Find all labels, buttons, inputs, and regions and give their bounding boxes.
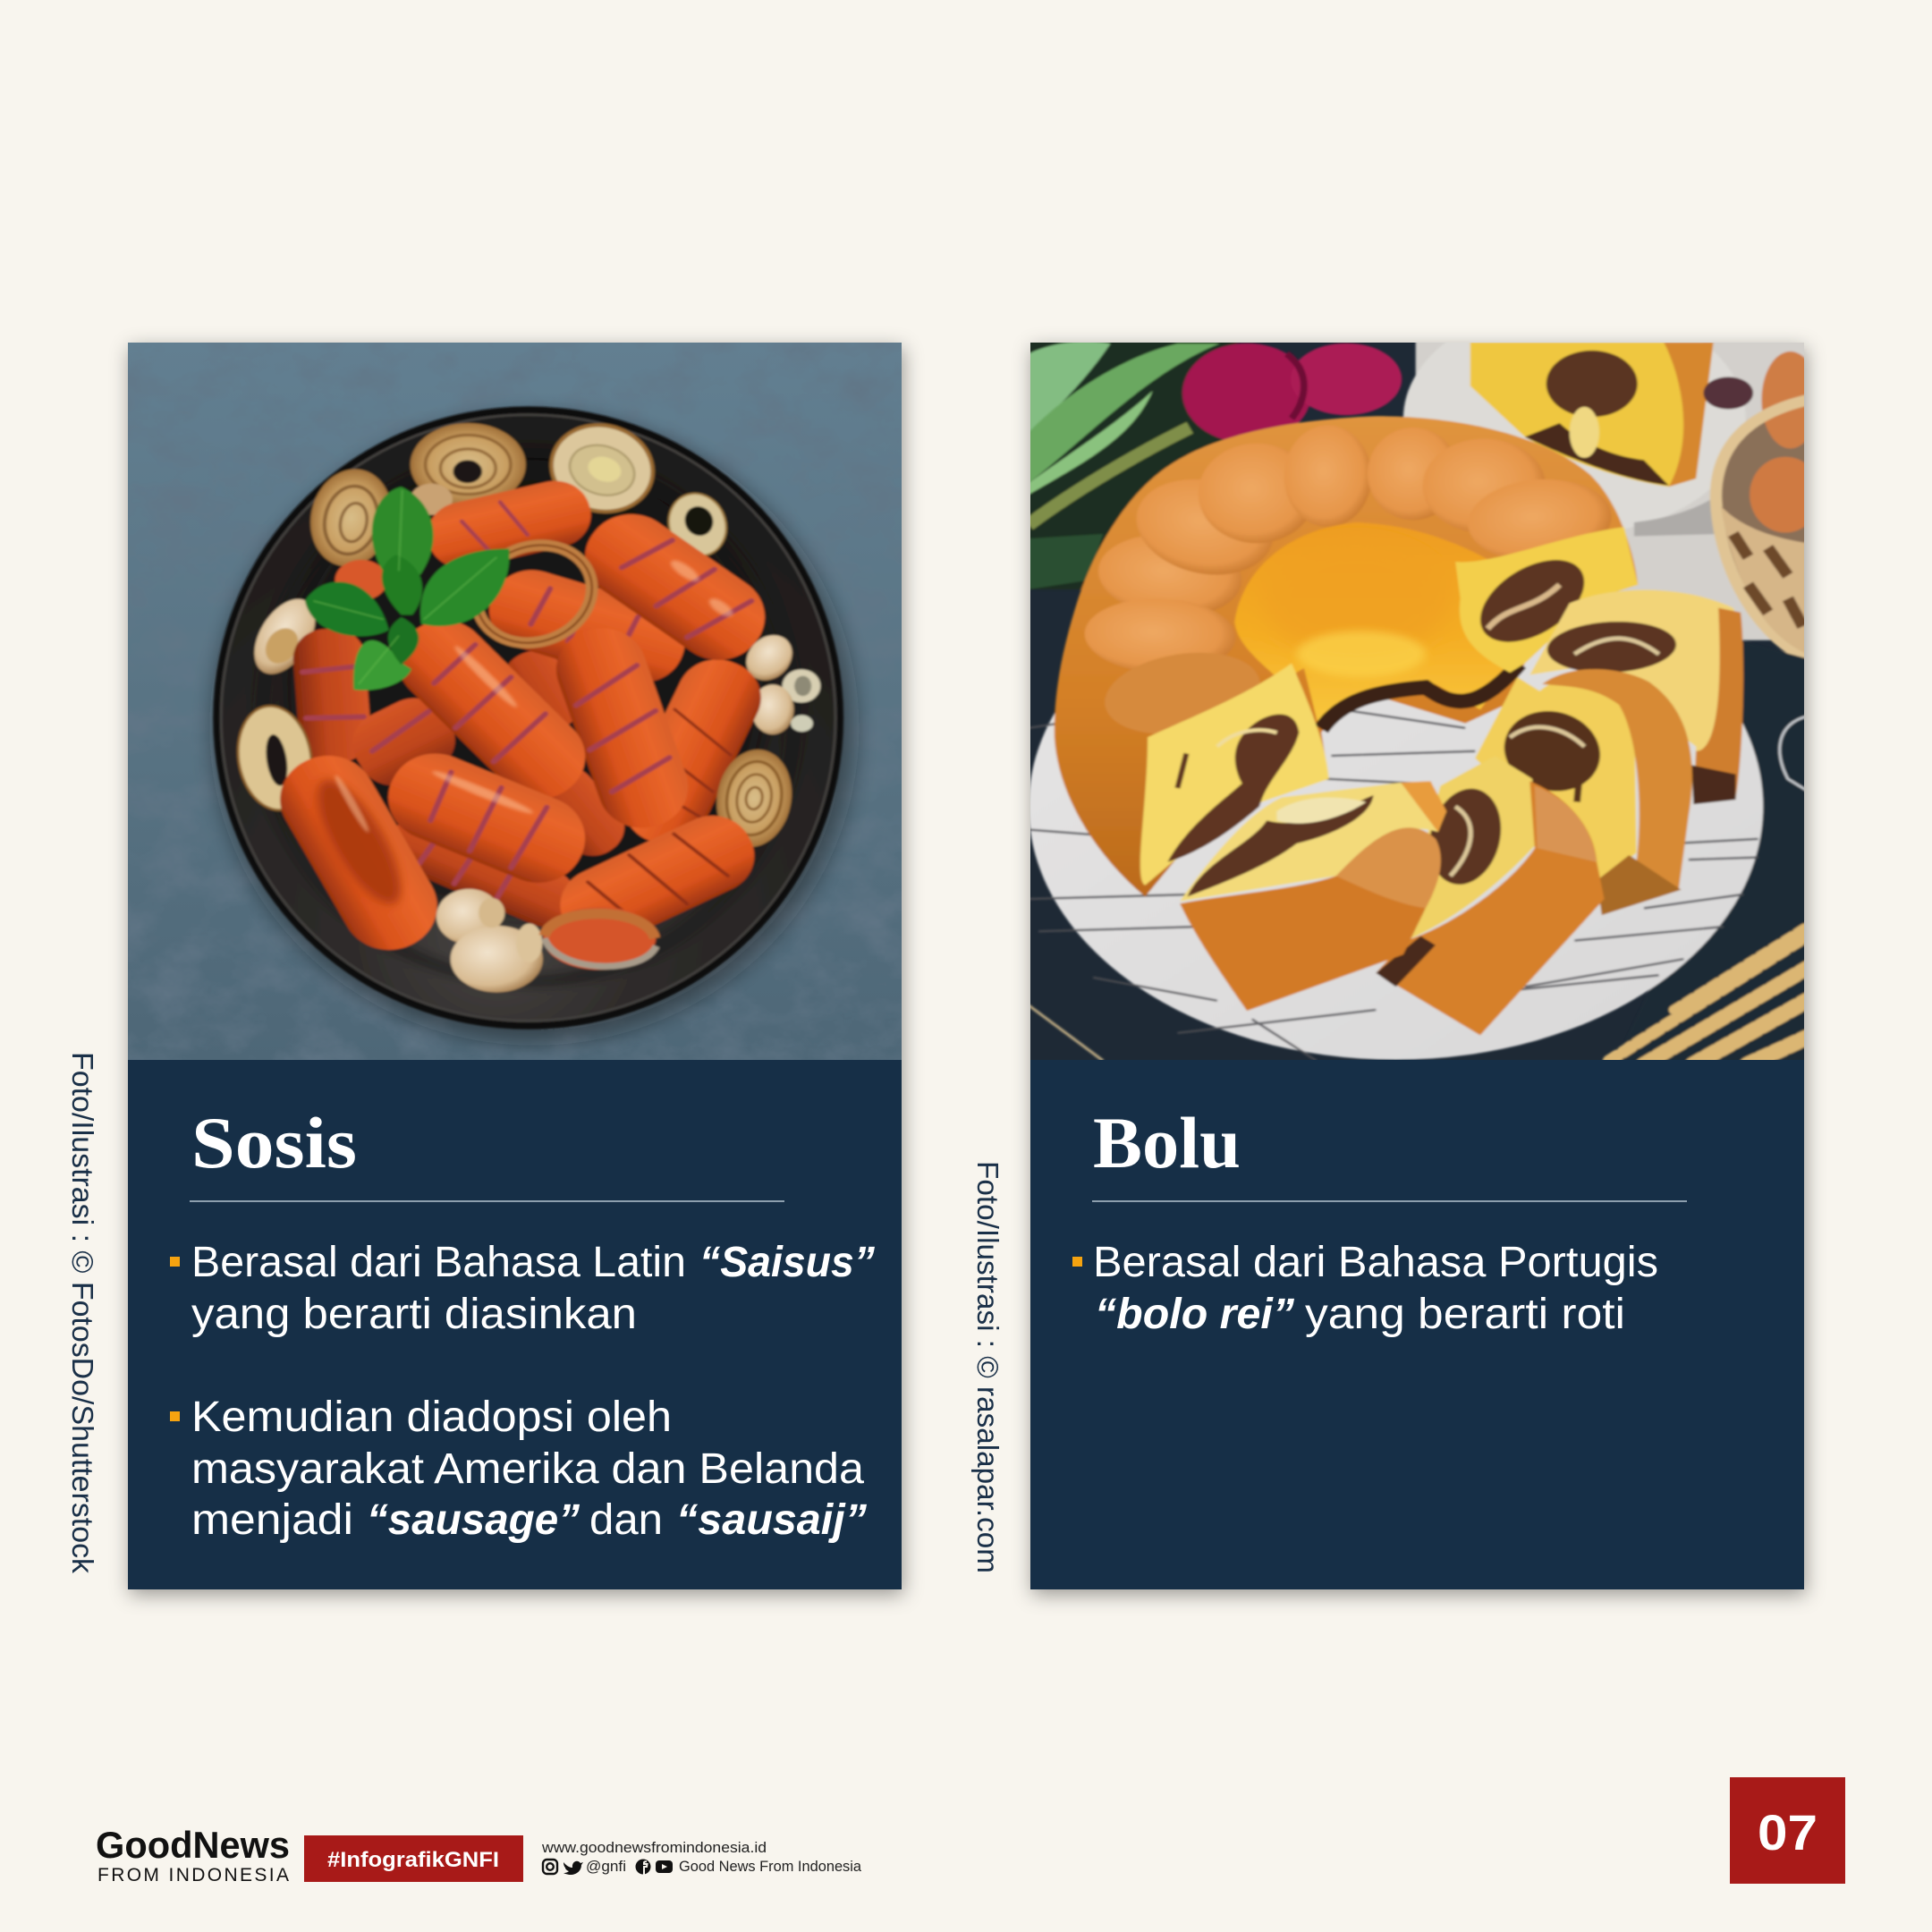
logo: GoodNews From Indonesia: FROM INDONESIA [97,1865,289,1885]
photo credit: bolu: Foto/Ilustrasi : © rasalapar.com [971,1161,1004,1573]
wheat [1609,927,1807,1064]
text panel: sosis [128,1060,902,1589]
dark table [1614,640,1808,1064]
footer contact [541,1839,862,1875]
text panel: bolu [1030,1060,1804,1589]
icon: facebook [635,1859,651,1875]
bullet 2: “sausage” [367,1496,580,1544]
heading: Bolu: Bolu [1093,1102,1241,1183]
logo: GoodNews From Indonesia: GoodNews [96,1824,290,1866]
icon: twitter [564,1861,583,1875]
heading: Sosis: Sosis [191,1102,357,1183]
garlic and bottom onion [436,889,543,992]
marble board [1030,640,1766,1060]
bullet text [1072,1239,1658,1338]
icon: instagram [543,1860,557,1874]
photo: marble cake [1029,303,1821,1064]
slice A [1180,781,1446,1011]
bullet 1 [170,1239,875,1338]
bullet 1: yang berarti diasinkan [191,1291,637,1338]
left cut face [1140,664,1329,886]
back onions [411,423,526,506]
panel: sosis card [128,343,902,1589]
panel: bolu card [1029,303,1821,1589]
page number: 07 [1758,1804,1818,1860]
bullet 2: menjadi [191,1496,353,1544]
back sausages [507,649,574,725]
bullet text: “bolo rei” [1095,1291,1294,1338]
bullet 2: dan [589,1496,663,1544]
photo: plate of sausages [128,343,902,1060]
photo credit: sosis: Foto/Ilustrasi : © FotosDo/Shutterstock [66,1052,99,1574]
bullet text: yang berarti roti [1305,1291,1625,1338]
front sausages [560,814,757,927]
bullet 2 [170,1394,867,1544]
page number [1730,1777,1845,1884]
basil [305,487,510,691]
centre hole [1234,522,1513,728]
bullet text: Berasal dari Bahasa Portugis [1093,1239,1658,1286]
logo: GoodNews From Indonesia [96,1824,290,1885]
bullet 1: Berasal dari Bahasa Latin [191,1239,686,1286]
tulips and leaves [1029,340,1402,589]
bullet 1: “Saisus” [699,1239,875,1286]
ring cake body [1055,416,1638,897]
footer contact: Good News From Indonesia [679,1858,862,1875]
background plate with cake slice [1403,303,1808,640]
right cut face [1455,527,1638,673]
egg basket [1716,352,1821,658]
silver ring [1780,716,1807,791]
slice D [1530,590,1743,804]
slice B [1376,756,1605,1035]
hashtag badge: #InfografikGNFI [327,1848,499,1872]
onion ring over sausage [472,538,601,651]
footer contact: @gnfi [586,1858,626,1875]
footer contact: www.goodnewsfromindonesia.id [541,1839,767,1856]
bullet 2: “sausaij” [676,1496,867,1544]
bullet 2: Kemudian diadopsi oleh [191,1394,672,1441]
icon: youtube [656,1860,673,1873]
bullet 2: masyarakat Amerika dan Belanda [191,1445,864,1493]
slice C [1475,669,1692,915]
divider [190,1200,784,1202]
hashtag badge [304,1835,523,1882]
onion ring and side onion [714,748,794,848]
divider [1092,1200,1687,1202]
